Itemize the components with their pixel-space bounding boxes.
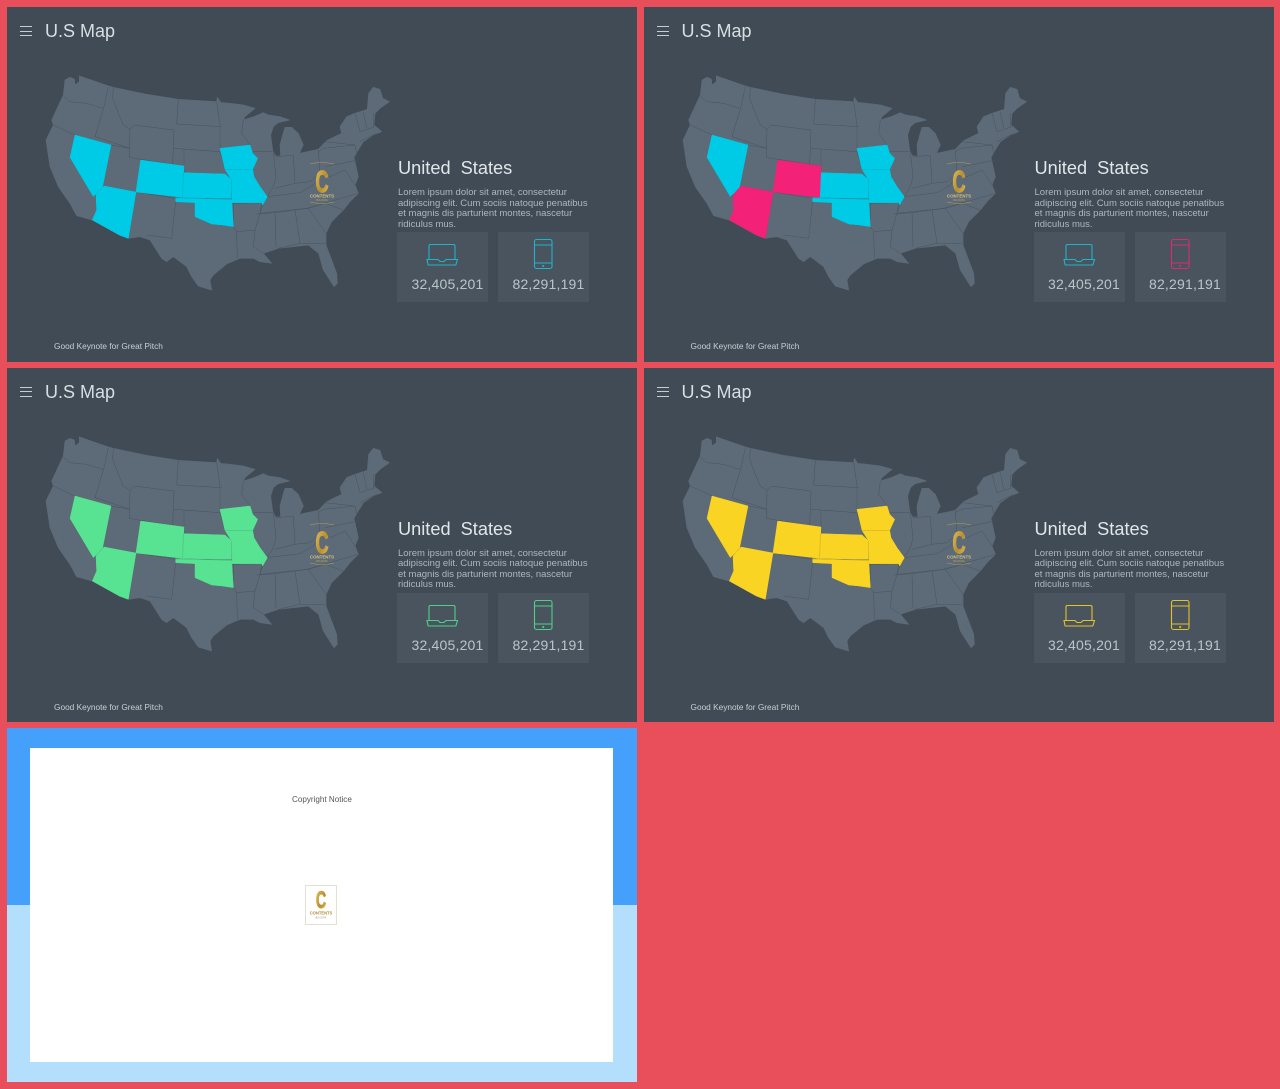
map: United States with cyan states: [46, 76, 390, 290]
stat card: phone: 82,291,191: [1149, 636, 1221, 652]
heading: United States: [398, 518, 512, 538]
logo: C: [316, 887, 326, 914]
panel: slide 3, green U.S map: [7, 368, 637, 722]
footer: Good Keynote for Great Pitch: [690, 341, 799, 351]
logo watermark: [310, 162, 334, 204]
text block: Lorem ipsum dolor sit amet, consectetur adipiscing elit. Cum sociis natoque penatibus et magnis dis parturient montes, nascetur ridiculus mus.: [398, 548, 588, 590]
stat card: laptop: 32,405,201: [1048, 636, 1120, 652]
stat card: phone: [498, 232, 589, 302]
title: U.S Map: [682, 21, 752, 41]
white card: [30, 748, 613, 1062]
stat card: phone: [498, 592, 589, 662]
footer: Good Keynote for Great Pitch: [690, 702, 799, 712]
logo watermark: [947, 523, 971, 565]
title: U.S Map: [45, 21, 115, 41]
panel: slide 1, cyan U.S map: [7, 7, 637, 362]
logo: [305, 885, 337, 925]
title: U.S Map: [682, 382, 752, 402]
stat card: laptop: 32,405,201: [1048, 276, 1120, 292]
panel: slide 4, yellow U.S map: [644, 368, 1274, 722]
icon: menu: [20, 387, 32, 397]
panel: copyright slide: [7, 728, 637, 1082]
icon: menu: [657, 387, 669, 397]
footer: Good Keynote for Great Pitch: [54, 341, 163, 351]
icon: menu: [657, 26, 669, 36]
stat card: laptop: [1034, 592, 1124, 662]
stat card: phone: [1134, 592, 1226, 662]
logo watermark: [947, 162, 971, 204]
stat card: laptop: [1034, 232, 1124, 302]
map: United States with yellow states: [682, 436, 1027, 652]
panel: slide 2, pink and cyan U.S map: [644, 7, 1274, 362]
heading: United States: [1034, 518, 1149, 538]
title: U.S Map: [45, 382, 115, 402]
map: United States with green states: [46, 436, 390, 652]
stat card: phone: 82,291,191: [512, 636, 585, 652]
text block: Lorem ipsum dolor sit amet, consectetur adipiscing elit. Cum sociis natoque penatibus et magnis dis parturient montes, nascetur ridiculus mus.: [398, 187, 588, 230]
copyright heading: Copyright Notice: [292, 795, 352, 804]
stat card: laptop: 32,405,201: [411, 636, 484, 652]
footer: Good Keynote for Great Pitch: [54, 702, 163, 712]
icon: menu: [20, 26, 32, 36]
logo: BIG DATA: [316, 916, 327, 919]
stat card: phone: 82,291,191: [512, 276, 585, 292]
stat card: laptop: [397, 592, 488, 662]
map: United States with pink and cyan states: [682, 76, 1027, 290]
text block: Lorem ipsum dolor sit amet, consectetur adipiscing elit. Cum sociis natoque penatibus et magnis dis parturient montes, nascetur ridiculus mus.: [1034, 548, 1224, 590]
logo: CONTENTS: [310, 910, 333, 915]
text block: Lorem ipsum dolor sit amet, consectetur adipiscing elit. Cum sociis natoque penatibus et magnis dis parturient montes, nascetur ridiculus mus.: [1034, 187, 1224, 230]
logo watermark: [310, 523, 334, 565]
heading: United States: [398, 158, 512, 178]
heading: United States: [1034, 158, 1149, 178]
stat card: phone: 82,291,191: [1149, 276, 1221, 292]
stat card: laptop: [397, 232, 488, 302]
stat card: laptop: 32,405,201: [411, 276, 484, 292]
stat card: phone: [1134, 232, 1226, 302]
